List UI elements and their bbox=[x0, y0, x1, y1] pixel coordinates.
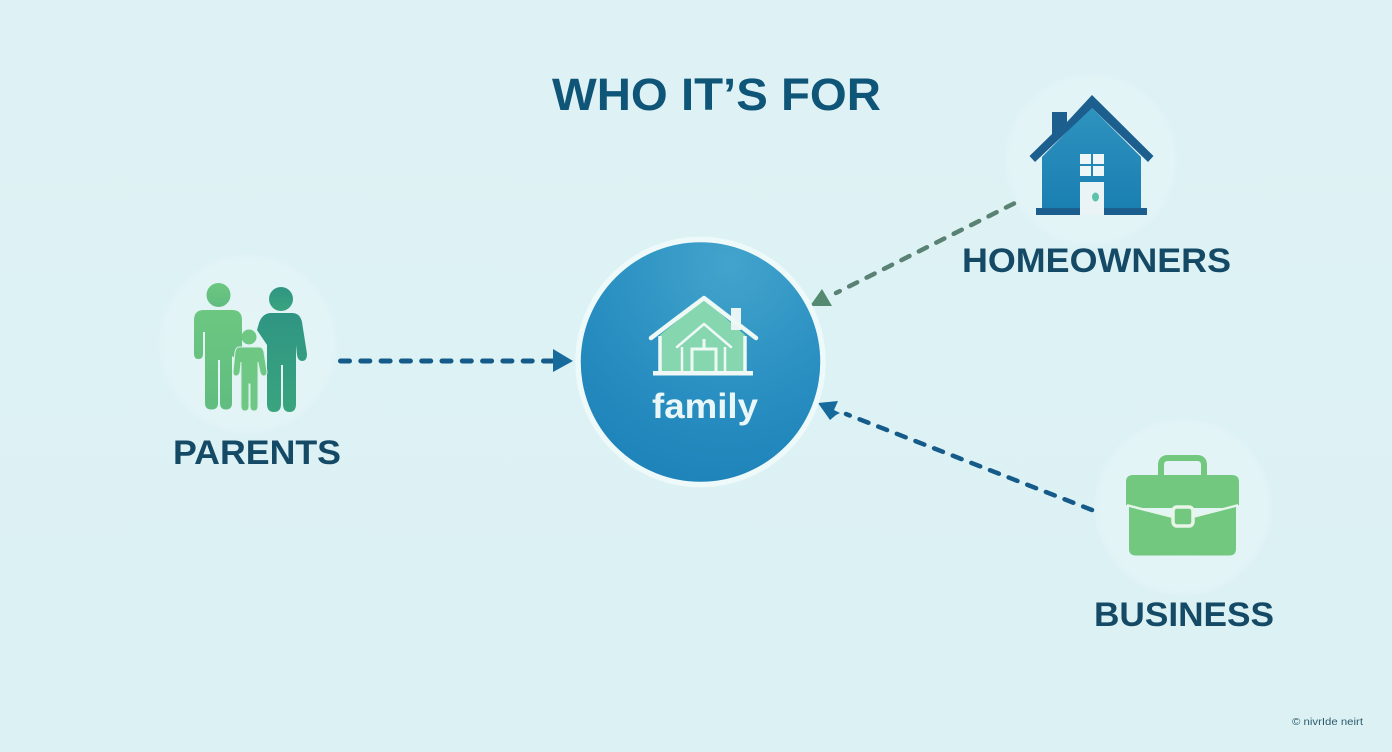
label: family: family bbox=[652, 387, 759, 426]
icon backdrop: parents bbox=[158, 254, 338, 434]
label: business: BUSINESS bbox=[1094, 596, 1274, 634]
icon: family house bbox=[651, 298, 756, 376]
arrow: business to family bbox=[818, 401, 1092, 510]
hub disc bbox=[578, 240, 823, 484]
adult figure right bbox=[257, 287, 307, 412]
label: homeowners: HOMEOWNERS bbox=[962, 242, 1231, 280]
icon backdrop: homeowners bbox=[1004, 73, 1178, 247]
arrow: parents to family bbox=[340, 349, 573, 372]
panel: business bbox=[1094, 418, 1274, 634]
adult figure left bbox=[194, 283, 242, 410]
child figure bbox=[233, 330, 267, 411]
title: WHO IT’S FOR bbox=[552, 69, 881, 120]
arrow: homeowners to family bbox=[810, 204, 1014, 306]
icon: house bbox=[1030, 95, 1154, 215]
footer credit: © nivrIde neirt bbox=[1292, 717, 1363, 728]
panel: family hub bbox=[578, 240, 823, 484]
panel: parents bbox=[158, 254, 341, 472]
label: parents: PARENTS bbox=[173, 434, 341, 472]
icon: family of three bbox=[194, 283, 307, 412]
icon: briefcase bbox=[1126, 458, 1239, 556]
icon backdrop: business bbox=[1094, 418, 1272, 596]
panel: homeowners bbox=[962, 73, 1231, 280]
